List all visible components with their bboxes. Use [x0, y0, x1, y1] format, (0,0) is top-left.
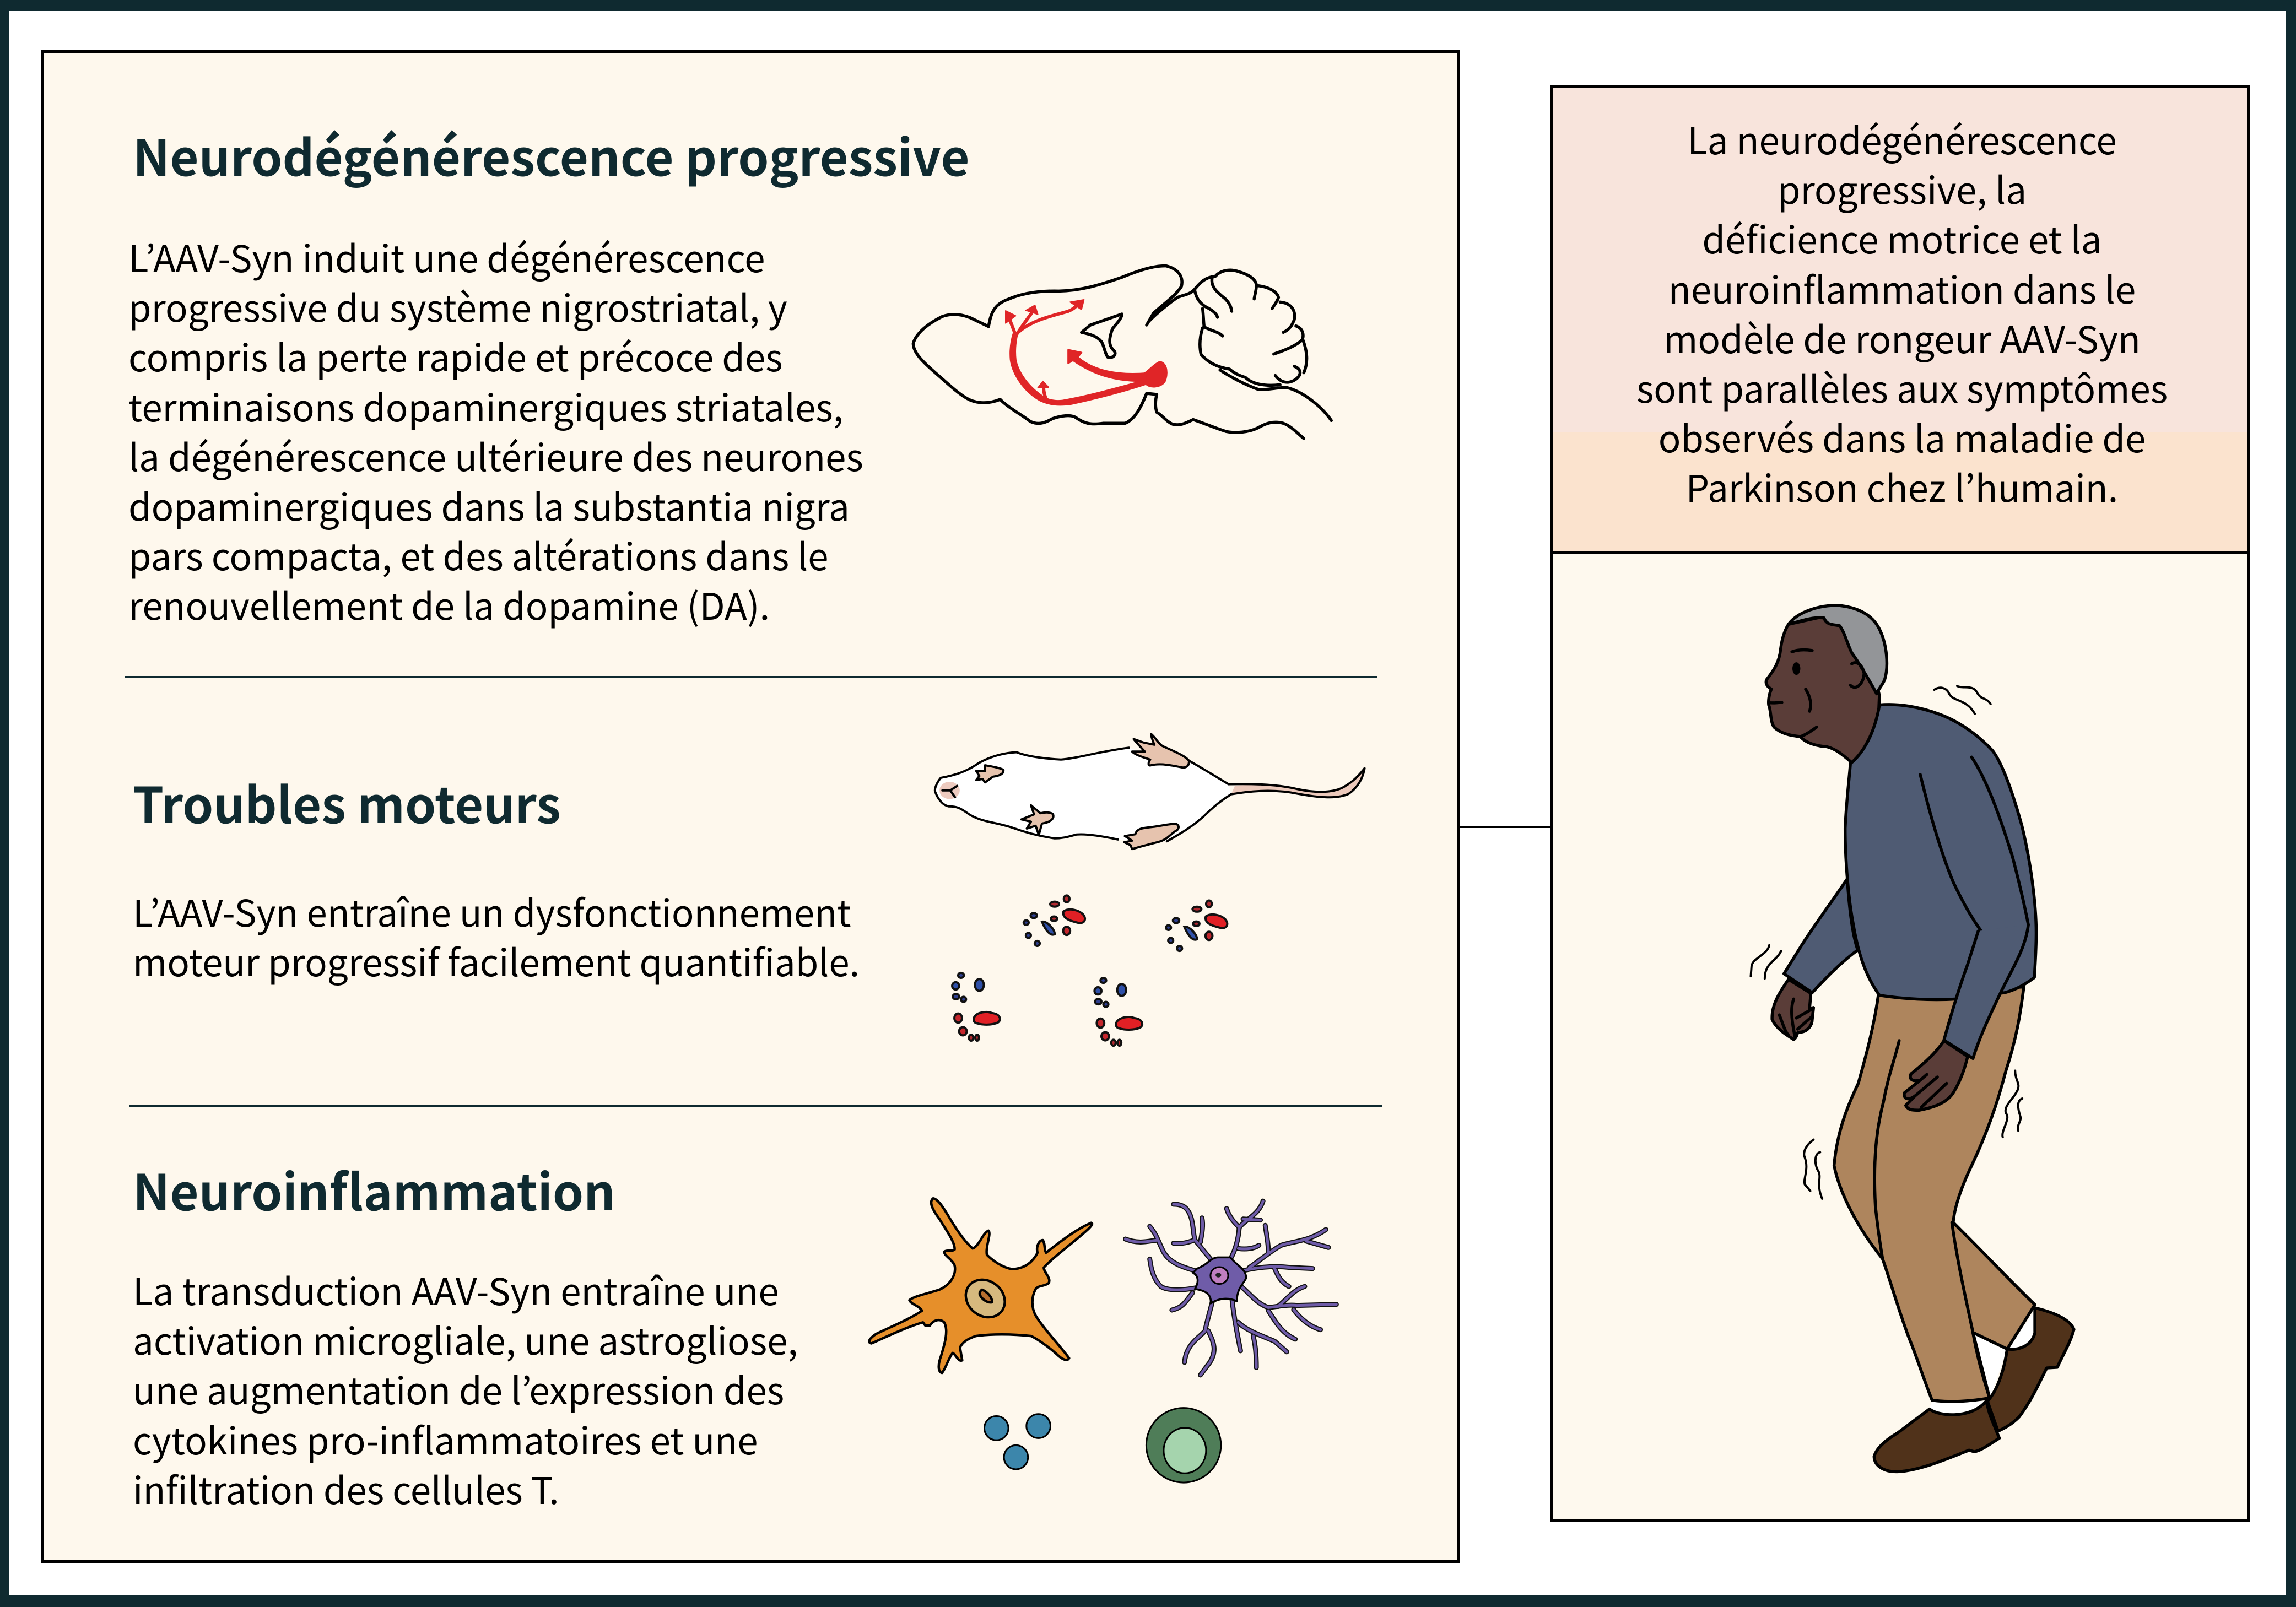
illustration: elderly man with Parkinson's symptoms	[1751, 605, 2074, 1471]
panel: left findings	[41, 50, 1460, 1563]
text: motor disorders	[133, 884, 860, 987]
panel: summary text box	[1553, 88, 2247, 554]
text: neuroinflammation: une augmentation de l’expression des	[133, 1362, 784, 1415]
icon: cytokines	[984, 1414, 1050, 1469]
icon: activated microglia	[869, 1198, 1092, 1373]
text: progressive neurodegeneration: progressive du système nigrostriatal, y	[128, 279, 787, 333]
footprint: upper right	[1166, 901, 1227, 951]
text: progressive neurodegeneration	[128, 230, 863, 631]
icon: T cell	[1146, 1408, 1221, 1482]
text: summary: progressive, la	[1778, 161, 2027, 215]
text: progressive neurodegeneration: dopaminergiques dans la substantia nigra	[128, 478, 850, 532]
icon: tremor marks upper body	[1751, 686, 1991, 978]
divider one	[125, 676, 1377, 678]
connector line	[1460, 826, 1550, 828]
text: summary: déficience motrice et la	[1702, 211, 2102, 264]
icon: tremor marks legs	[1804, 1071, 2022, 1199]
text: progressive neurodegeneration: renouvellement de la dopamine (DA).	[128, 577, 770, 631]
divider two	[129, 1105, 1382, 1107]
text: progressive neurodegeneration: la dégénérescence ultérieure des neurones	[128, 429, 863, 482]
text: progressive neurodegeneration: L’AAV-Syn induit une dégénérescence	[128, 230, 765, 283]
panel: right summary and patient	[1550, 85, 2250, 1522]
man: front hand	[1904, 1041, 1968, 1110]
heading: motor disorders: Troubles moteurs	[133, 766, 561, 837]
text: neuroinflammation: cytokines pro-inflammatoires et une	[133, 1412, 758, 1465]
text: summary: observés dans la maladie de	[1658, 410, 2146, 463]
text: neuroinflammation: infiltration des cellules T.	[133, 1462, 559, 1515]
footprint: upper left	[1024, 895, 1085, 946]
man: torso, arms and head	[1766, 605, 2036, 1058]
text: summary: La neurodégénérescence	[1687, 112, 2117, 165]
text: progressive neurodegeneration: pars compacta, et des altérations dans le	[128, 528, 829, 581]
text: neuroinflammation: La transduction AAV-Syn entraîne une	[133, 1263, 779, 1316]
heading: neuroinflammation: Neuroinflammation	[133, 1153, 615, 1225]
text: summary: sont parallèles aux symptômes	[1636, 360, 2168, 414]
icon: astrocyte	[1125, 1201, 1336, 1375]
footprint: lower right	[1094, 978, 1142, 1046]
text: neuroinflammation: activation microgliale, une astrogliose,	[133, 1312, 798, 1366]
text: summary: neuroinflammation dans le	[1668, 261, 2136, 315]
icon: rodent brain with red nigrostriatal pathway	[913, 266, 1331, 439]
man: legs and shoes	[1834, 987, 2074, 1471]
text: motor disorders: moteur progressif facilement quantifiable.	[133, 934, 860, 987]
text: summary: Parkinson chez l’humain.	[1686, 459, 2118, 513]
text: summary	[1636, 112, 2168, 513]
footprint: lower left	[952, 973, 1000, 1041]
text: progressive neurodegeneration: compris la perte rapide et précoce des	[128, 329, 783, 382]
text: motor disorders: L’AAV-Syn entraîne un dysfonctionnement	[133, 884, 851, 938]
text: neuroinflammation	[133, 1263, 798, 1515]
text: summary: modèle de rongeur AAV-Syn	[1663, 311, 2141, 364]
text: progressive neurodegeneration: terminaisons dopaminergiques striatales,	[128, 379, 843, 432]
icon: white rodent seen from below	[934, 734, 1365, 849]
heading: progressive neurodegeneration: Neurodégénérescence progressive	[133, 118, 970, 190]
icon: paw prints	[952, 895, 1227, 1046]
